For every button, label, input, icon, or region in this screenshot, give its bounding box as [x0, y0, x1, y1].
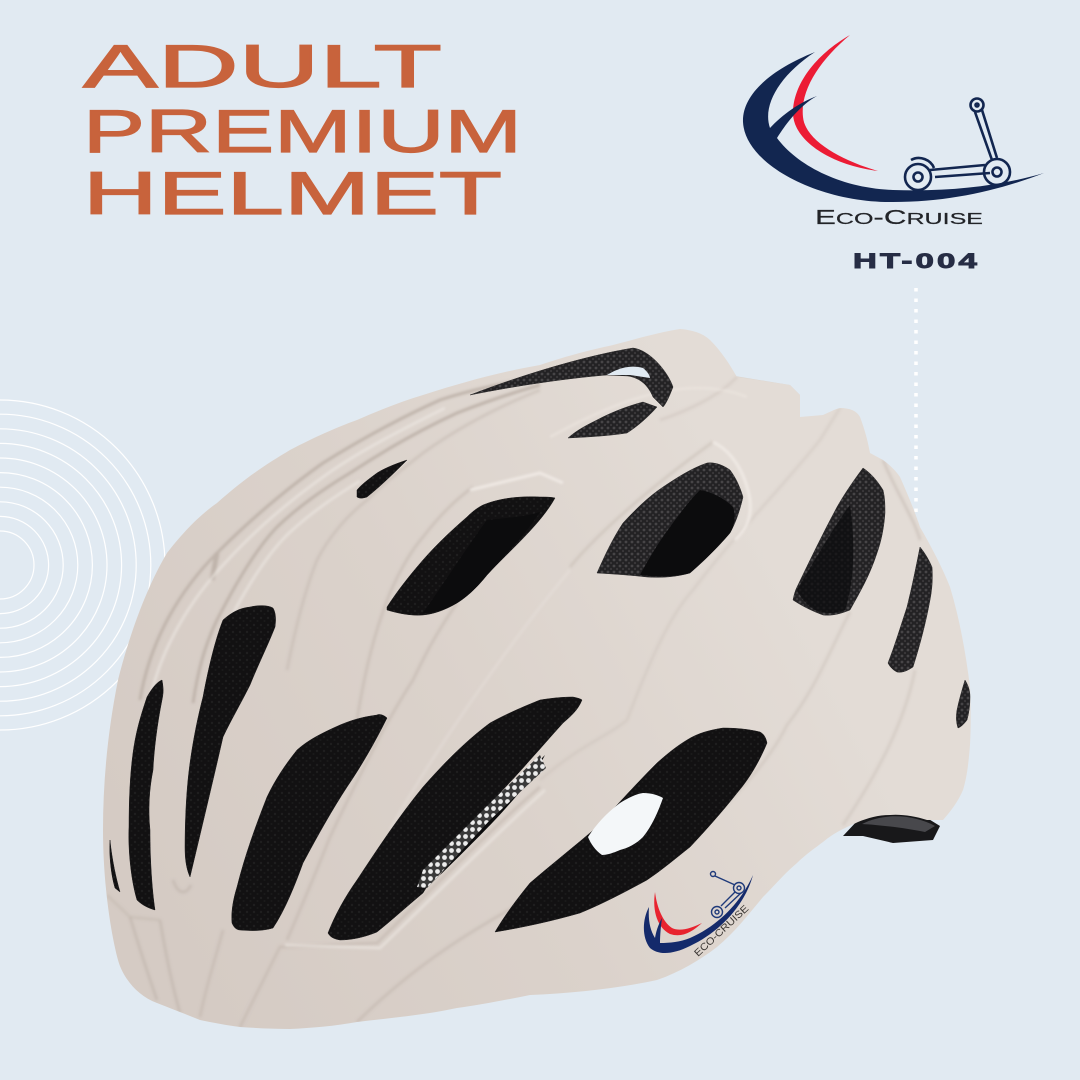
vent: far right [956, 680, 970, 728]
vent: left long [185, 606, 276, 877]
ridge shadows [107, 377, 920, 1027]
vent: far left [129, 680, 163, 910]
vent: front centre [328, 697, 582, 940]
logo wordmark: E CO -C RUISE [815, 207, 983, 229]
dotted pointer line [914, 288, 918, 512]
title: PREMIUM [83, 98, 522, 165]
helmet printed logo [644, 872, 753, 959]
vents with grey foam [470, 348, 970, 728]
title: HELMET [83, 160, 502, 227]
printed logo red swoosh [654, 892, 702, 935]
vent: front left [232, 714, 387, 931]
vent inner black areas [420, 490, 853, 895]
vents [110, 460, 767, 940]
shell ridges [107, 377, 920, 1027]
logo swoosh: navy [743, 52, 1044, 202]
vent: upper right [597, 463, 743, 577]
top vent see-through hole [607, 367, 650, 378]
decorative concentric circles [0, 400, 165, 730]
vent: right [793, 468, 885, 615]
printed logo scooter [710, 872, 744, 918]
vent: top small [357, 460, 407, 498]
helmet shell [103, 329, 971, 1029]
printed logo navy swoosh [644, 875, 753, 953]
vent: top lower [568, 402, 657, 438]
rear plate behind shell [735, 376, 800, 417]
vent: upper centre [387, 497, 555, 615]
model code: HT-004 [853, 250, 980, 273]
logo scooter [905, 98, 1010, 190]
vent: front right [495, 728, 767, 932]
helmet [103, 329, 971, 1029]
logo swoosh: red [793, 35, 878, 171]
title [83, 33, 522, 227]
brand logo [743, 35, 1044, 229]
underside strap [843, 812, 940, 843]
strap highlight [862, 816, 935, 832]
vent see-through hole [588, 793, 663, 855]
reflective strip [417, 755, 546, 888]
ridge highlights [150, 388, 750, 948]
vent: side sliver [110, 840, 120, 892]
title: ADULT [83, 33, 442, 100]
printed logo wordmark: ECO-CRUISE [693, 903, 751, 959]
vent: right narrow [888, 547, 932, 672]
vent: top long [470, 348, 673, 407]
